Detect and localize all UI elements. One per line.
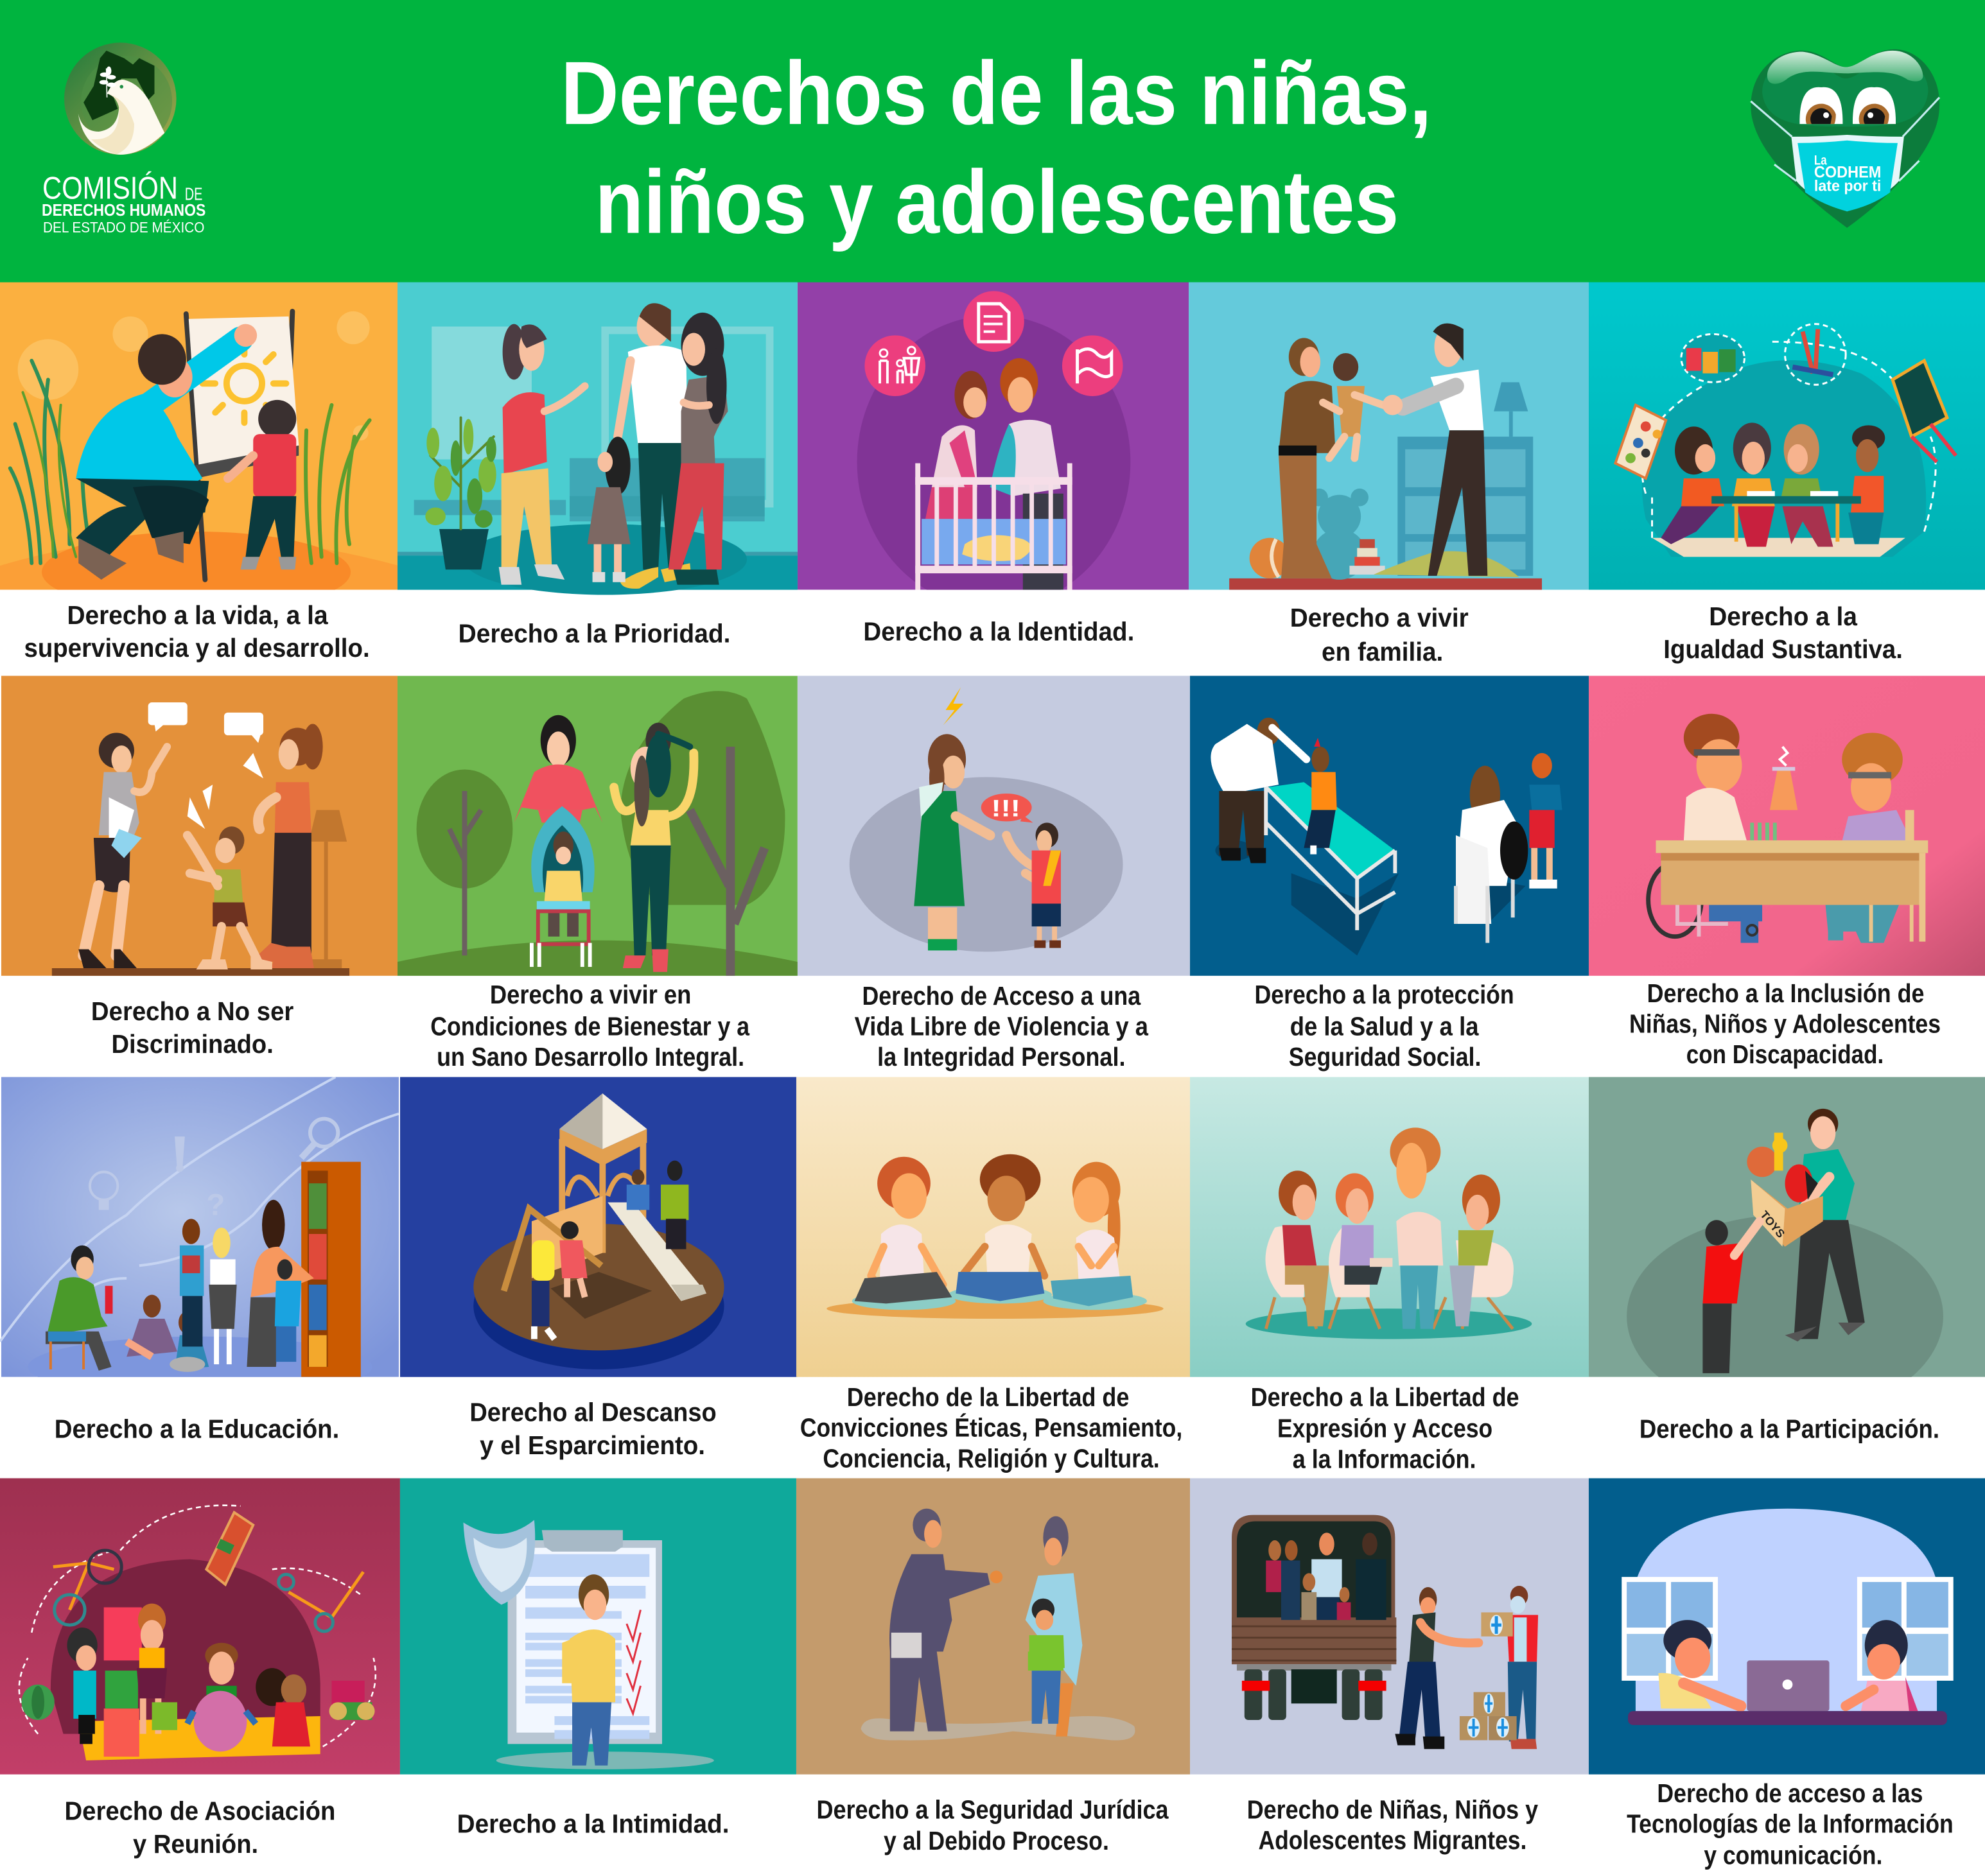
caption: un Sano Desarrollo Integral. <box>437 1042 744 1072</box>
icon: family <box>864 335 925 396</box>
flask and tubes <box>1752 747 1797 840</box>
caption <box>1629 978 1941 1069</box>
person in wheelchair <box>1648 714 1762 943</box>
speech bubble: !!! <box>992 794 1020 821</box>
caption: Derecho a la Libertad de <box>1251 1382 1519 1412</box>
icon: paints <box>1681 334 1744 382</box>
child 1 <box>855 1157 952 1303</box>
faint icons <box>90 1119 338 1222</box>
boy <box>1658 1620 1741 1708</box>
mask text: CODHEM <box>1814 164 1881 182</box>
bed <box>1266 782 1395 930</box>
caption: Derecho de la Libertad de <box>847 1382 1129 1412</box>
caption: Derecho a vivir en <box>490 980 691 1009</box>
scene: parents over crib <box>798 282 1189 609</box>
logo wordmark <box>42 170 205 236</box>
panel: educación <box>0 1077 400 1443</box>
icon: palette <box>1615 405 1666 478</box>
scene: family with stroller in park <box>398 676 798 976</box>
panel: vida <box>0 282 399 663</box>
caption: Derecho a vivir <box>1290 603 1469 632</box>
scene: truck and aid <box>1190 1478 1589 1775</box>
panel: identidad <box>798 282 1189 646</box>
teacher seated <box>46 1246 112 1371</box>
mask text: La <box>1814 152 1827 168</box>
panel: intimidad <box>400 1478 796 1838</box>
man left with baby <box>1279 338 1390 578</box>
aid worker man <box>1395 1587 1478 1749</box>
man <box>562 1574 615 1766</box>
mask text: late por ti <box>1814 178 1881 195</box>
icon: document <box>963 291 1024 352</box>
logo: Comisión de Derechos Humanos <box>42 42 205 236</box>
logo wordmark: DEL ESTADO DE MÉXICO <box>43 219 204 236</box>
icon: heart mascot with mask <box>1751 49 1939 228</box>
seated person 3 <box>1449 1174 1514 1326</box>
scene: children meditating <box>796 1077 1190 1377</box>
scene: lawyer with woman and boy <box>796 1478 1190 1775</box>
father with child on shoulders <box>614 723 694 972</box>
playhouse <box>504 1093 647 1291</box>
scene: children with laptop <box>1589 1478 1985 1775</box>
scene: science lab with wheelchair <box>1589 676 1985 976</box>
caption <box>430 980 749 1072</box>
child 3 <box>1780 424 1833 547</box>
header banner <box>0 0 1985 283</box>
laptop <box>1747 1660 1830 1711</box>
woman with papers <box>78 733 167 968</box>
caption <box>1290 603 1469 666</box>
person right <box>1826 733 1914 943</box>
logo wordmark: DERECHOS HUMANOS <box>42 202 205 220</box>
woman left <box>499 324 585 585</box>
aid worker woman <box>1507 1586 1538 1749</box>
caption: Discriminado. <box>111 1029 274 1059</box>
aid boxes <box>1460 1612 1517 1740</box>
caption: Derecho a la vida, a la <box>67 600 328 630</box>
panel: tecnologías <box>1589 1478 1985 1870</box>
seated child <box>1304 738 1337 855</box>
caption: y comunicación. <box>1704 1841 1882 1870</box>
panel: participación <box>1589 1077 1985 1443</box>
caption: Derecho a la Identidad. <box>863 616 1134 646</box>
woman <box>914 734 990 950</box>
scene: man painting with child <box>0 282 399 612</box>
panel: salud <box>1190 676 1589 1072</box>
title: Derechos de las niñas, <box>561 42 1432 143</box>
truck <box>1232 1515 1396 1720</box>
toy crocodile <box>1374 552 1519 577</box>
child 1 <box>1661 426 1724 544</box>
caption <box>1251 1382 1519 1474</box>
scene: clipboard, shield and man <box>400 1478 796 1775</box>
man <box>618 303 691 589</box>
panel: descanso <box>400 1077 798 1460</box>
caption: Derecho a la Seguridad Jurídica <box>816 1795 1169 1825</box>
caption: Derecho a la Intimidad. <box>457 1809 729 1838</box>
icon: lightning <box>943 687 963 725</box>
caption: de la Salud y a la <box>1290 1011 1479 1041</box>
girl <box>588 437 631 582</box>
title <box>561 42 1432 252</box>
caption: Expresión y Acceso <box>1277 1413 1492 1443</box>
caption: a la Información. <box>1293 1445 1476 1474</box>
caption: la Integridad Personal. <box>877 1042 1125 1072</box>
caption: y el Esparcimiento. <box>480 1430 705 1460</box>
child <box>1702 1220 1760 1373</box>
icon: ball <box>22 1685 55 1720</box>
caption: Derecho a la protección <box>1255 980 1514 1009</box>
desk <box>1628 1711 1947 1725</box>
caption: y Reunión. <box>133 1829 258 1859</box>
doctor right <box>1456 766 1528 943</box>
icon: shield <box>463 1520 535 1605</box>
scene: library <box>0 1077 400 1397</box>
caption <box>816 1795 1169 1855</box>
woman <box>1026 1516 1082 1737</box>
boy <box>188 826 272 969</box>
boy <box>1028 1599 1065 1724</box>
panel: no discriminación <box>1 676 398 1059</box>
floor <box>1652 538 1905 557</box>
toys <box>1747 1133 1818 1203</box>
caption: Derecho a la Participación. <box>1640 1414 1939 1443</box>
slide <box>608 1203 706 1301</box>
caption: Derecho de acceso a las <box>1657 1778 1923 1808</box>
scene: woman and boy <box>798 676 1190 976</box>
panel: migrantes <box>1190 1478 1589 1855</box>
woman right <box>669 313 728 585</box>
caption: Derecho a la Prioridad. <box>459 618 730 648</box>
caption: Seguridad Social. <box>1289 1042 1481 1072</box>
icon: bike <box>53 1550 121 1625</box>
panel: igualdad sustantiva <box>1589 282 1985 664</box>
floor <box>78 1716 320 1760</box>
icon: toy car <box>329 1681 375 1720</box>
child 2 <box>956 1154 1044 1301</box>
panel: seguridad jurídica <box>796 1478 1190 1855</box>
caption: Vida Libre de Violencia y a <box>855 1011 1148 1041</box>
logo wordmark: DE <box>185 184 202 204</box>
lamp <box>309 810 347 968</box>
chair legs <box>1266 1298 1513 1329</box>
panel: libertad de convicciones <box>796 1077 1190 1473</box>
caption <box>855 981 1148 1072</box>
scene: family in living room <box>398 282 798 595</box>
icon: abacus <box>206 1513 253 1585</box>
table <box>1711 491 1861 542</box>
ball <box>1250 538 1290 578</box>
migrants in truck <box>1266 1533 1386 1620</box>
boy <box>1006 822 1061 948</box>
caption: Derecho de Niñas, Niños y <box>1247 1795 1539 1825</box>
caption: y al Debido Proceso. <box>884 1826 1109 1855</box>
caption: supervivencia y al desarrollo. <box>24 633 370 663</box>
stroller <box>531 806 595 967</box>
stacking toy <box>1349 539 1385 575</box>
caption <box>469 1398 717 1460</box>
scene: adoption handover <box>1189 282 1589 590</box>
librarian and child <box>247 1200 314 1367</box>
child 3 <box>1051 1162 1133 1306</box>
bookcase <box>301 1162 361 1377</box>
caption: Derecho a la Inclusión de <box>1647 978 1924 1008</box>
icon: chalkboard <box>1893 361 1956 462</box>
crib <box>915 463 1072 590</box>
caption <box>24 600 370 663</box>
child <box>228 400 296 569</box>
child standing <box>1529 753 1562 889</box>
scene: playground <box>400 1077 798 1377</box>
caption: Derecho al Descanso <box>469 1398 717 1427</box>
blocks <box>104 1608 142 1757</box>
icon: scooter <box>279 1572 363 1631</box>
mother <box>924 371 988 525</box>
panel: discapacidad <box>1589 676 1985 1069</box>
caption: Igualdad Sustantiva. <box>1663 634 1903 664</box>
scene: doctors with children <box>1190 676 1589 976</box>
panel: bienestar <box>398 676 798 1072</box>
easel <box>186 311 299 580</box>
caption: Niñas, Niños y Adolescentes <box>1629 1009 1941 1039</box>
caption: Derecho a la <box>1709 602 1857 631</box>
window left <box>1622 1577 1718 1681</box>
children on slide <box>627 1161 688 1249</box>
scene: children playing <box>0 1478 400 1775</box>
caption <box>91 996 294 1059</box>
logo wordmark: COMISIÓN <box>42 170 178 205</box>
clipboard <box>507 1530 662 1744</box>
caption: Adolescentes Migrantes. <box>1258 1825 1526 1855</box>
plant <box>425 418 496 569</box>
icon: flag <box>1062 335 1123 396</box>
seated person 1 <box>1265 1170 1329 1326</box>
caption: Derecho de Acceso a una <box>862 981 1141 1011</box>
speech bubble <box>981 794 1033 822</box>
caption <box>1663 602 1903 664</box>
caption: Derecho a la Educación. <box>55 1414 339 1443</box>
child 2 <box>1732 422 1775 547</box>
girl <box>1846 1620 1918 1711</box>
toy box: TOYS <box>1758 1208 1787 1240</box>
standing woman <box>1390 1127 1443 1329</box>
standing children <box>180 1219 237 1364</box>
child 4 <box>1848 425 1885 544</box>
caption: Derecho de Asociación <box>65 1796 335 1826</box>
desk <box>1656 840 1928 942</box>
caption <box>1247 1795 1539 1855</box>
lawyer <box>889 1509 1002 1732</box>
doctor left <box>1211 718 1306 863</box>
caption <box>65 1796 335 1859</box>
scene: group discussion <box>1190 1077 1589 1377</box>
scene: toy donation <box>1589 1077 1985 1418</box>
caption: con Discapacidad. <box>1686 1039 1884 1069</box>
man <box>76 324 257 580</box>
children reading <box>127 1295 209 1372</box>
ground blob <box>861 1716 1135 1741</box>
caption: Convicciones Éticas, Pensamiento, <box>800 1412 1182 1442</box>
toy box <box>1751 1179 1823 1247</box>
panel: vivir en familia <box>1189 282 1589 666</box>
caption <box>800 1382 1182 1473</box>
caption <box>1255 980 1514 1072</box>
panel: libertad de expresión <box>1190 1077 1589 1474</box>
title: niños y adolescentes <box>595 152 1399 252</box>
mother pushing stroller <box>514 715 602 822</box>
father <box>990 358 1063 590</box>
caption: Conciencia, Religión y Cultura. <box>823 1444 1160 1473</box>
man right <box>1383 324 1487 576</box>
scene: four children at table <box>1589 282 1985 590</box>
mask text <box>1814 152 1881 195</box>
teddy bear <box>1310 489 1369 580</box>
caption: en familia. <box>1322 637 1443 666</box>
panel: prioridad <box>398 282 798 648</box>
children at swing <box>532 1221 588 1339</box>
window right <box>1857 1577 1954 1681</box>
scene: adults arguing over child <box>1 676 398 976</box>
faint icons: ? <box>206 1188 225 1222</box>
caption: Condiciones de Bienestar y a <box>430 1011 749 1041</box>
caption <box>1627 1778 1954 1870</box>
speech bubbles <box>148 702 263 743</box>
seated person 2 <box>1329 1173 1392 1298</box>
children <box>67 1604 310 1751</box>
icon: crayons <box>1785 324 1846 385</box>
panel: libre de violencia <box>798 676 1190 1072</box>
woman red top <box>250 724 323 968</box>
adult <box>1785 1109 1865 1342</box>
panel: asociación <box>0 1478 400 1859</box>
caption: Derecho a No ser <box>91 996 294 1026</box>
